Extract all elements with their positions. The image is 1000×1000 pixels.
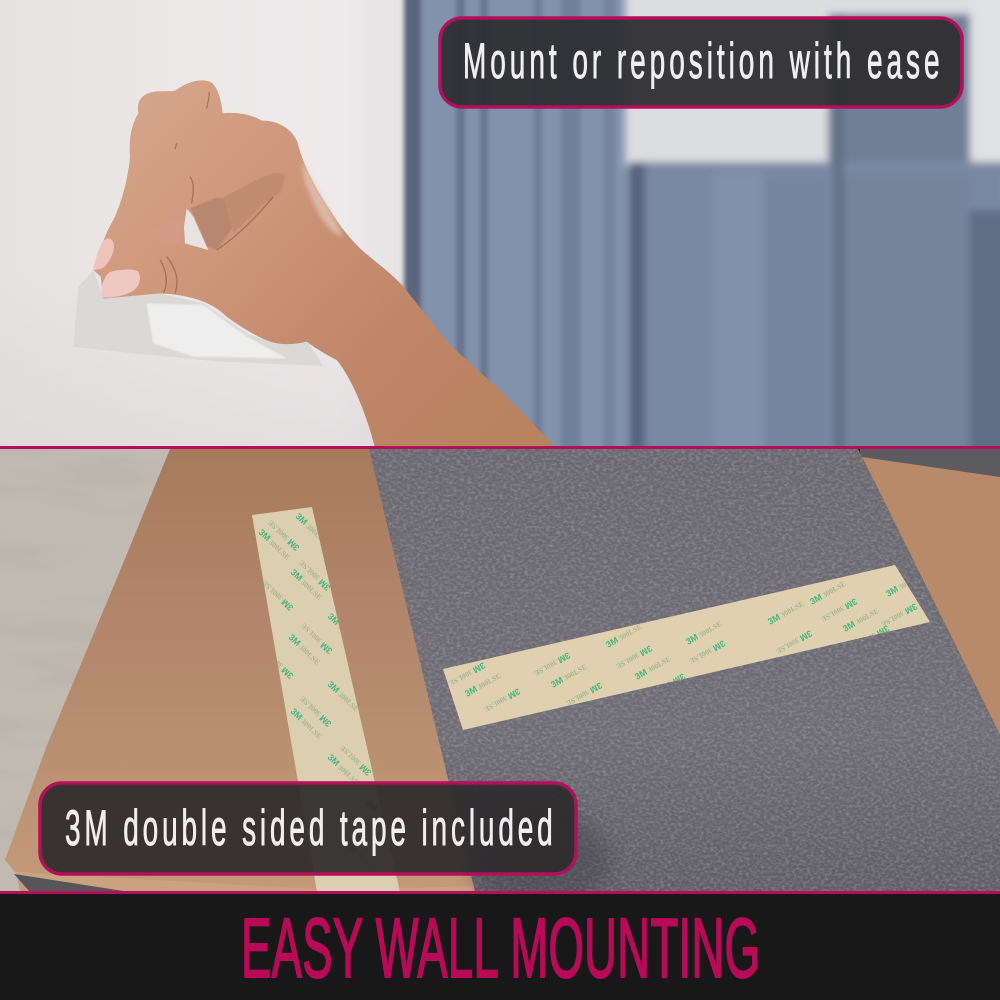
3M tape strip on felt: 3M 300LSE [604,621,643,650]
callout: 3M tape included [40,783,576,874]
3M tape strip on board: 3M 300LSE [265,518,301,553]
background acoustic panels [404,0,1000,465]
3M tape strip on board: 3M 300LSE [337,743,373,778]
3M tape strip on felt: 3M 300LSE [880,601,919,630]
3M tape strip on felt: 3M 300LSE [615,643,654,672]
panel: tape application photo [0,449,1000,910]
floor [0,449,175,892]
3M tape strip on felt: 3M 300LSE [775,628,814,657]
3M tape strip on felt: 3M 300LSE [688,638,727,667]
3M tape strip on felt: 3M 300LSE [808,578,847,607]
3M tape strip on felt: 3M 300LSE [633,653,672,682]
3M tape strip on board: 3M 300LSE [287,632,323,667]
tape on wall [73,270,323,366]
3M tape strip on board [252,507,400,892]
3M tape strip on board: 3M 300LSE [297,694,333,729]
panel: wall mounting photo [0,0,1000,465]
3M tape strip on board: 3M 300LSE [344,839,380,874]
fingernail: index [93,238,114,271]
3M tape strip on felt: 3M 300LSE [820,596,859,625]
white wall [0,0,420,447]
callout: 3M tape included: 3M double sided tape included [65,799,553,856]
3M tape strip on board: 3M 300LSE [289,567,325,602]
divider line [0,446,1000,449]
3M tape strip on felt: 3M 300LSE [483,686,522,715]
3M tape strip on felt: 3M 300LSE [549,661,588,690]
3M tape strip on board: 3M 300LSE [364,797,400,832]
wood corner right [862,457,1000,735]
3M tape strip on felt: 3M 300LSE [565,680,604,709]
callout: mount or reposition: Mount or reposition with ease [463,32,940,89]
title banner [0,891,1000,1000]
3M tape strip on felt: 3M 300LSE [463,670,502,699]
finger creases [160,92,273,293]
3M tape strip on board: 3M 300LSE [294,511,330,546]
gap between fingers [184,208,208,250]
3M tape strip on board: 3M 300LSE [296,558,332,593]
title banner: EASY WALL MOUNTING [241,902,760,996]
fingernail: thumb [101,270,140,298]
3M tape strip on felt: 3M 300LSE [533,650,572,679]
3M tape strip on felt: 3M 300LSE [766,598,805,627]
wooden board [5,449,480,892]
3M tape strip on board: 3M 300LSE [326,611,362,646]
3M tape strip on felt: 3M 300LSE [448,660,487,689]
felt panel [369,449,1000,910]
3M tape strip on board: 3M 300LSE [289,706,325,741]
3M tape strip on felt: 3M 300LSE [852,623,891,652]
3M tape strip on board: 3M 300LSE [326,679,362,714]
3M tape strip on board: 3M 300LSE [257,527,293,562]
hand and arm [93,80,557,448]
3M tape strip on felt [443,565,930,730]
3M tape strip on felt: 3M 300LSE [884,570,923,599]
3M tape strip on board: 3M 300LSE [353,816,389,851]
3M tape strip on board: 3M 300LSE [298,621,334,656]
3M tape strip on felt: 3M 300LSE [841,605,880,634]
3M tape strip on board: 3M 300LSE [259,646,295,681]
3M tape strip on board: 3M 300LSE [326,752,362,787]
3M tape strip on board: 3M 300LSE [259,578,295,613]
3M tape strip on felt: 3M 300LSE [648,671,687,700]
callout: mount or reposition [440,18,962,107]
3M tape strip on felt: 3M 300LSE [684,618,723,647]
